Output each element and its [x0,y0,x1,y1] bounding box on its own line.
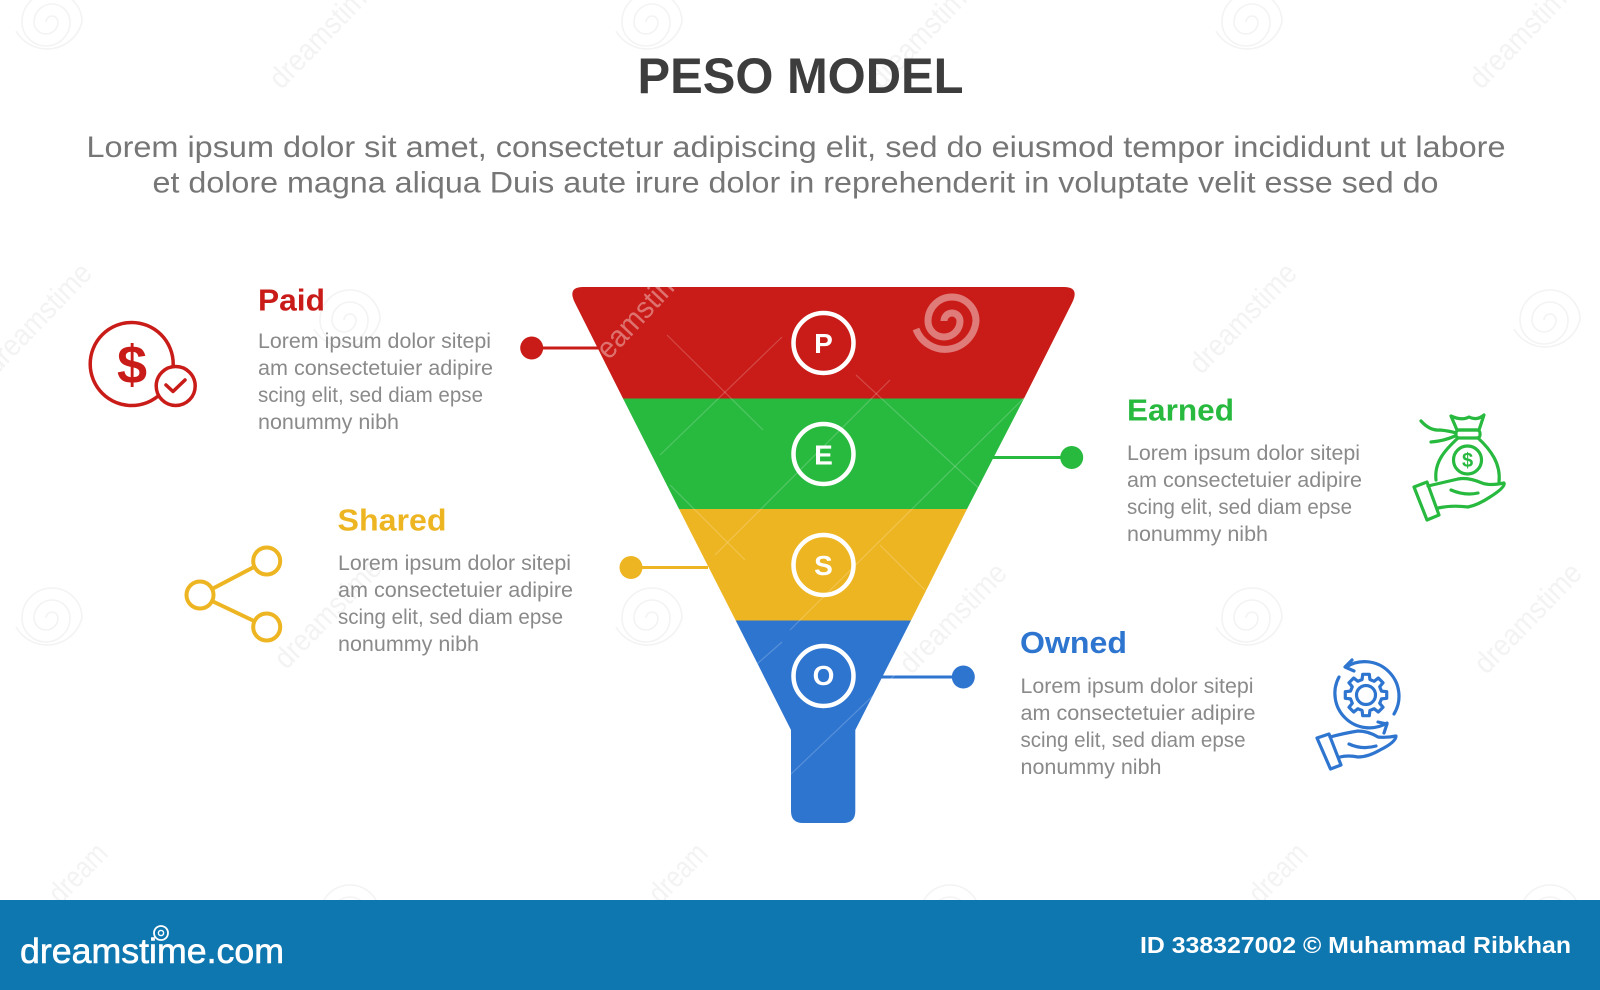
badge: P: P [814,328,833,359]
funnel band: paid [572,287,1075,398]
icon: money bag on hand: $ [1462,450,1473,472]
panel: owned [1020,625,1256,779]
connector: earned [993,446,1083,469]
connector: owned [880,666,975,688]
text block: shared: am consectetuier adipire [338,578,573,602]
infographic canvas: dreamstime [893,557,1014,680]
infographic canvas: dream [42,837,114,910]
intro paragraph: Lorem ipsum dolor sit amet, consectetur adipiscing elit, sed do eiusmod tempor incididunt ut labore [86,131,1505,164]
text block: earned: am consectetuier adipire [1127,468,1362,492]
icon: gear on hand [1317,660,1399,769]
badge: P [794,313,854,373]
heading: owned: Owned [1020,625,1127,660]
heading: shared: Shared [338,502,446,538]
text block: owned: am consectetuier adipire [1020,701,1256,725]
panel: paid [258,282,493,434]
text block: earned: nonummy nibh [1127,522,1268,546]
text block: earned: scing elit, sed diam epse [1127,495,1352,519]
panel: shared [338,502,573,656]
infographic canvas: dream [1242,837,1314,910]
text block: owned: nonummy nibh [1020,755,1162,779]
text block: owned [1020,674,1256,779]
badge: E [794,424,854,484]
funnel chart: dreamstime [573,253,698,384]
logo: dreamstime.com: dreamstime.com [20,932,284,971]
infographic canvas: dreamstime [268,552,389,675]
infographic canvas: dream [642,837,714,910]
infographic canvas: dreamstime [1183,257,1304,380]
text block: paid [258,329,493,434]
text block: paid: am consectetuier adipire [258,356,493,380]
heading: earned: Earned [1127,392,1234,428]
text block: paid: scing elit, sed diam epse [258,383,483,407]
funnel band: shared [679,509,967,620]
connector: paid [520,336,600,360]
text block: paid: Lorem ipsum dolor sitepi [258,329,491,353]
text block: earned: Lorem ipsum dolor sitepi [1127,441,1360,465]
icon: dollar coin with check [90,322,195,406]
badge: S [794,535,854,595]
badge: S: S [814,550,833,581]
intro paragraph: et dolore magna aliqua Duis aute irure dolor in reprehenderit in voluptate velit esse sed do [152,166,1438,200]
text block: owned: Lorem ipsum dolor sitepi [1020,674,1254,698]
icon: dollar coin with check: $ [117,335,147,395]
icon: share nodes [186,548,280,640]
credit text: ID 338327002 © Muhammad Ribkhan [1140,932,1571,958]
title: PESO MODEL [638,48,964,104]
icon: money bag on hand [1414,415,1504,520]
text block: shared: Lorem ipsum dolor sitepi [338,551,571,575]
badge: O [794,646,854,706]
text block: owned: scing elit, sed diam epse [1020,728,1246,752]
text block: shared: scing elit, sed diam epse [338,605,563,629]
funnel chart [572,253,1075,823]
badge: E: E [814,440,833,470]
connector: shared [620,556,708,579]
badge: O: O [813,660,834,691]
text block: paid: nonummy nibh [258,410,399,434]
text block: shared: nonummy nibh [338,632,479,656]
panel: earned [1127,392,1362,546]
footer bar [0,900,1600,990]
intro paragraph [86,131,1505,200]
funnel band: owned with spout [736,620,911,823]
heading: paid: Paid [258,282,325,318]
text block: shared [338,551,573,656]
infographic canvas: dreamstime [1468,557,1589,680]
text block: earned [1127,441,1362,546]
funnel band: earned [623,398,1024,509]
